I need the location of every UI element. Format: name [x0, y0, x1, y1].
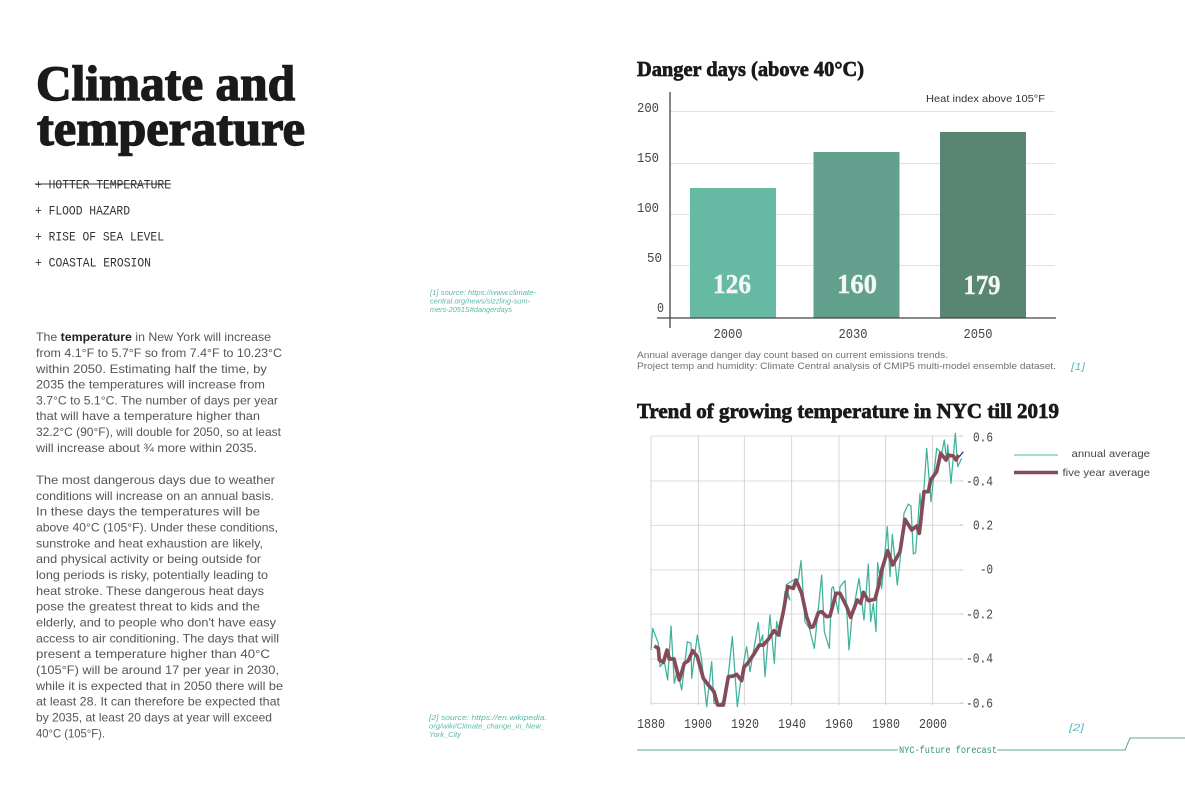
- source note 2: [2] source: https://en.wikipedia.: [428, 713, 547, 722]
- list of climate risks: + FLOOD HAZARD: [35, 204, 130, 218]
- body paragraph 1: 3.7°C to 5.1°C. The number of days per year: [36, 394, 278, 408]
- source note 1: central.org/news/sizzling-sum-: [430, 296, 530, 306]
- bar value labels: [713, 269, 1000, 300]
- x axis labels: [714, 328, 992, 343]
- source note 2: [428, 713, 547, 739]
- source note 2: org/wiki/Climate_change_in_New_: [429, 722, 545, 730]
- list of climate risks: + RISE OF SEA LEVEL: [35, 230, 164, 244]
- bar 2030: [814, 152, 900, 318]
- body paragraph 2: long periods is risky, potentially leading to: [36, 568, 268, 582]
- source note 1: [429, 288, 537, 314]
- x axis labels: 2050: [964, 328, 992, 343]
- y axis labels: 0.2: [973, 520, 993, 534]
- bar 2000: [690, 188, 776, 318]
- body paragraph 2: at least 28. It can therefore be expected that: [36, 695, 281, 709]
- reference marker 1: [1]: [1070, 361, 1086, 373]
- body paragraph 2: The most dangerous days due to weather: [36, 473, 275, 487]
- annual average line: [651, 433, 962, 707]
- legend: five year average: [1062, 467, 1150, 479]
- x axis labels: 1940: [778, 718, 806, 733]
- body paragraph 1: from 4.1°F to 5.7°F so from 7.4°F to 10.23°C: [36, 346, 282, 360]
- footer line with label: [637, 738, 1185, 757]
- body paragraph 2: In these days the temperatures will be: [36, 505, 260, 519]
- body paragraph 1: 2035 the temperatures will increase from: [36, 378, 265, 392]
- footer line with label: NYC-future forecast: [899, 745, 997, 757]
- line chart: temperature trend: [637, 432, 993, 733]
- title: [36, 55, 305, 156]
- y axis labels: -0.2: [966, 608, 993, 624]
- body paragraph 2: by 2035, at least 20 days at year will exceed: [36, 710, 272, 724]
- x axis labels: [637, 718, 947, 733]
- legend: annual average: [1072, 448, 1150, 460]
- y axis labels: 200: [637, 102, 659, 117]
- body paragraph 1: [35, 330, 282, 455]
- body paragraph 1: within 2050. Estimating half the time, by: [35, 362, 267, 376]
- reference marker 2: [2]: [1068, 722, 1085, 734]
- body paragraph 2: conditions will increase on an annual basis.: [36, 489, 274, 503]
- list of climate risks: [35, 178, 171, 270]
- legend: [1014, 448, 1150, 479]
- five year average line: [654, 453, 959, 705]
- y axis labels: -0.4: [966, 476, 993, 490]
- bar value labels: 160: [837, 269, 877, 299]
- body paragraph 1: will increase about ¾ more within 2035.: [35, 441, 257, 455]
- y axis labels: 0.6: [973, 432, 993, 446]
- source note 2: York_City: [429, 730, 462, 739]
- y axis labels: 50: [647, 252, 662, 267]
- list of climate risks: + HOTTER TEMPERATURE: [35, 178, 171, 192]
- y axis labels: 100: [637, 202, 659, 217]
- source note 1: [1] source: https://www.climate-: [429, 288, 537, 297]
- bar value labels: 126: [713, 269, 751, 299]
- source note 1: mers-2051S#dangerdays: [430, 305, 512, 314]
- y axis labels: 0: [657, 302, 664, 317]
- body paragraph 2: while it is expected that in 2050 there will be: [35, 679, 283, 693]
- body paragraph 2: present a temperature higher than 40°C: [36, 647, 271, 661]
- x axis labels: 2030: [838, 328, 868, 343]
- heading: temperature trend: Trend of growing temperature in NYC till 2019: [637, 399, 1059, 423]
- body paragraph 1: 32.2°C (90°F), will double for 2050, so at least: [36, 425, 282, 439]
- body paragraph 2: (105°F) will be around 17 per year in 2030,: [36, 663, 279, 677]
- x axis labels: 2000: [919, 718, 947, 733]
- x axis labels: 1980: [872, 718, 900, 733]
- title: temperature: [37, 100, 305, 156]
- y axis labels: -0.4: [966, 652, 993, 668]
- y axis labels: -0.6: [966, 698, 993, 712]
- y axis labels: [966, 432, 993, 712]
- title: Climate and: [36, 55, 295, 111]
- y axis labels: [637, 102, 664, 317]
- x axis labels: 2000: [714, 328, 742, 343]
- y axis labels: 150: [637, 152, 659, 167]
- body paragraph 1: The temperature in New York will increase: [36, 330, 271, 344]
- y axis labels: -0: [980, 564, 993, 578]
- bar value labels: 179: [964, 270, 1000, 300]
- body paragraph 2: heat stroke. These dangerous heat days: [36, 584, 264, 598]
- bar 2050: [940, 132, 1026, 318]
- body paragraph 2: above 40°C (105°F). Under these conditions,: [36, 520, 278, 534]
- x axis labels: 1880: [637, 718, 665, 733]
- body paragraph 2: and physical activity or being outside for: [36, 552, 261, 566]
- bar chart caption: [637, 350, 1056, 372]
- body paragraph 2: sunstroke and heat exhaustion are likely,: [36, 536, 263, 550]
- bar chart: danger days: [637, 92, 1056, 343]
- list of climate risks: + COASTAL EROSION: [35, 256, 151, 270]
- axes: [657, 92, 1056, 328]
- bar chart caption: Annual average danger day count based on current emissions trends.: [637, 350, 948, 361]
- bar chart caption: Project temp and humidity: Climate Central analysis of CMIP5 multi-model ensemble dataset.: [637, 361, 1056, 372]
- x axis labels: 1920: [731, 718, 759, 733]
- x axis labels: 1960: [825, 718, 853, 733]
- body paragraph 2: access to air conditioning. The days that will: [36, 631, 279, 645]
- x axis labels: 1900: [684, 718, 712, 733]
- heading: danger days: Danger days (above 40°C): [637, 57, 864, 81]
- body paragraph 2: [35, 473, 283, 740]
- body paragraph 2: pose the greatest threat to kids and the: [36, 600, 260, 614]
- chart note: heat index: Heat index above 105°F: [926, 93, 1045, 105]
- body paragraph 2: 40°C (105°F).: [36, 726, 105, 740]
- body paragraph 1: that will have a temperature higher than: [36, 409, 260, 423]
- body paragraph 2: elderly, and to people who don't have easy: [36, 616, 276, 630]
